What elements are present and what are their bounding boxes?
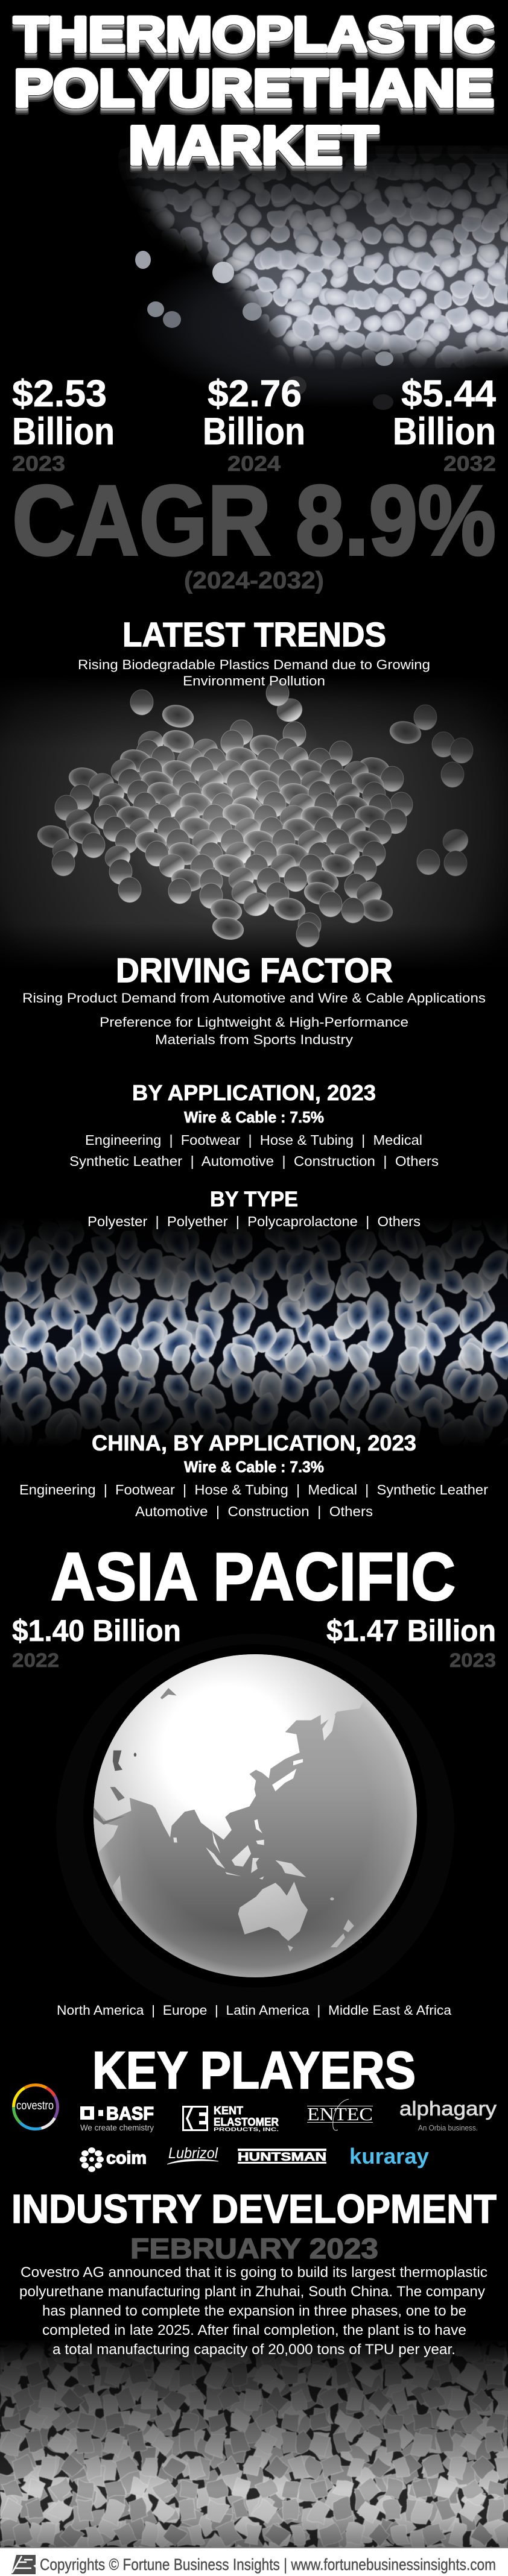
icon: globe — [94, 1654, 417, 1977]
logo: BASF: We create chemistry — [80, 2123, 154, 2132]
crystal image — [0, 2339, 508, 2548]
latest trends text — [78, 657, 430, 688]
logo: Alphagary: alphagary — [399, 2097, 497, 2120]
type list: Polyester | Polyether | Polycaprolactone | Others — [87, 1214, 421, 1229]
title — [14, 7, 494, 176]
development paragraph: polyurethane manufacturing plant in Zhuhai, South China. The company — [19, 2284, 485, 2300]
stat 2023: Billion — [12, 411, 115, 453]
stat 2023 — [12, 373, 115, 476]
logo: Coim: coim — [106, 2149, 147, 2168]
stat 2023: $2.53 — [12, 373, 107, 415]
footer — [0, 2547, 508, 2576]
title: THERMOPLASTIC — [14, 7, 494, 62]
Asia Pacific statistics: 2022 — [12, 1649, 59, 1671]
driving factor heading: DRIVING FACTOR — [116, 951, 393, 990]
logo: Alphagary — [399, 2097, 497, 2132]
latest trends text: Environment Pollution — [183, 673, 325, 688]
title: MARKET — [129, 116, 378, 176]
driving factor text: Materials from Sports Industry — [155, 1032, 353, 1047]
China heading: CHINA, BY APPLICATION, 2023 — [92, 1431, 416, 1455]
logo: Huntsman: HUNTSMAN — [238, 2151, 326, 2164]
blue pellet image — [0, 1224, 508, 1441]
logo: BASF — [80, 2103, 154, 2132]
Asia Pacific statistics: $1.47 Billion — [326, 1614, 496, 1648]
key player logos — [13, 2085, 497, 2172]
by application heading: BY APPLICATION, 2023 — [132, 1080, 376, 1105]
market size statistics — [12, 373, 497, 476]
China application list: Automotive | Construction | Others — [135, 1504, 373, 1519]
by type heading: BY TYPE — [210, 1188, 298, 1211]
title: POLYURETHANE — [14, 59, 494, 118]
China application list — [19, 1482, 488, 1519]
Asia Pacific heading: ASIA PACIFIC — [51, 1539, 456, 1614]
driving factor text: Rising Product Demand from Automotive and Wire & Cable Applications — [22, 990, 486, 1006]
application list — [69, 1132, 439, 1169]
key players heading: KEY PLAYERS — [92, 2041, 416, 2100]
logo: Covestro — [13, 2085, 58, 2129]
logo: Entec — [307, 2099, 373, 2130]
logo: Kent Elastomer — [182, 2105, 279, 2132]
China wire and cable share: Wire & Cable : 7.3% — [184, 1458, 324, 1476]
stat 2023: 2023 — [12, 452, 65, 476]
latest trends text: Rising Biodegradable Plastics Demand due to Growing — [78, 657, 430, 672]
logo: Entec: ENTEC — [307, 2103, 373, 2124]
stat 2032 — [393, 373, 497, 476]
stat 2024: 2024 — [227, 452, 281, 476]
logo: Covestro: covestro — [16, 2099, 54, 2112]
stat 2024: $2.76 — [208, 373, 302, 415]
stat 2032: 2032 — [443, 452, 496, 476]
logo: Alphagary: An Orbia business. — [418, 2123, 478, 2132]
logo: Kent Elastomer: KENT — [214, 2105, 243, 2117]
latest trends heading: LATEST TRENDS — [122, 616, 386, 654]
industry development section — [11, 2187, 497, 2358]
logo: Coim — [80, 2147, 147, 2172]
development paragraph: completed in late 2025. After final completion, the plant is to have — [42, 2322, 466, 2338]
Asia Pacific statistics — [12, 1614, 496, 1671]
stat 2032: Billion — [393, 411, 496, 453]
date: FEBRUARY 2023 — [130, 2232, 378, 2264]
icon: Fortune Business Insights logo — [11, 2555, 36, 2574]
stat 2024: Billion — [203, 411, 305, 453]
wire and cable share: Wire & Cable : 7.5% — [184, 1108, 324, 1126]
development paragraph: Covestro AG announced that it is going to build its largest thermoplastic — [21, 2264, 487, 2281]
logo: Huntsman — [238, 2149, 326, 2164]
latest trends pellet image — [0, 675, 508, 971]
logo: BASF: BASF — [106, 2103, 154, 2124]
by application section — [69, 1080, 439, 1169]
development paragraph — [19, 2264, 487, 2358]
regions list: North America | Europe | Latin America | Middle East & Africa — [57, 2003, 452, 2018]
logo: Kent Elastomer: PRODUCTS, INC. — [214, 2127, 279, 2132]
application list: Engineering | Footwear | Hose & Tubing | Medical — [85, 1132, 422, 1148]
development paragraph: has planned to complete the expansion in three phases, one to be — [42, 2303, 466, 2319]
logo: Lubrizol: Lubrizol — [168, 2145, 218, 2162]
stat 2024 — [203, 373, 305, 476]
stat 2032: $5.44 — [401, 373, 497, 415]
by type section — [87, 1188, 421, 1229]
logo: Kuraray: kuraray — [349, 2144, 429, 2168]
Asia Pacific statistics: $1.40 Billion — [12, 1614, 181, 1648]
application list: Synthetic Leather | Automotive | Construction | Others — [69, 1153, 439, 1169]
Asia Pacific statistics: 2023 — [449, 1649, 496, 1671]
China application list: Engineering | Footwear | Hose & Tubing | Medical | Synthetic Leather — [19, 1482, 488, 1497]
hero pellet image — [119, 146, 508, 410]
driving factor text — [22, 990, 486, 1047]
driving factor section — [22, 951, 486, 1047]
CAGR period: (2024-2032) — [184, 567, 324, 594]
driving factor text: Preference for Lightweight & High-Performance — [100, 1015, 408, 1030]
China by application section — [19, 1431, 488, 1519]
development paragraph: a total manufacturing capacity of 20,000 tons of TPU per year. — [52, 2341, 456, 2358]
logo: Kent Elastomer: ELASTOMER — [214, 2116, 279, 2128]
